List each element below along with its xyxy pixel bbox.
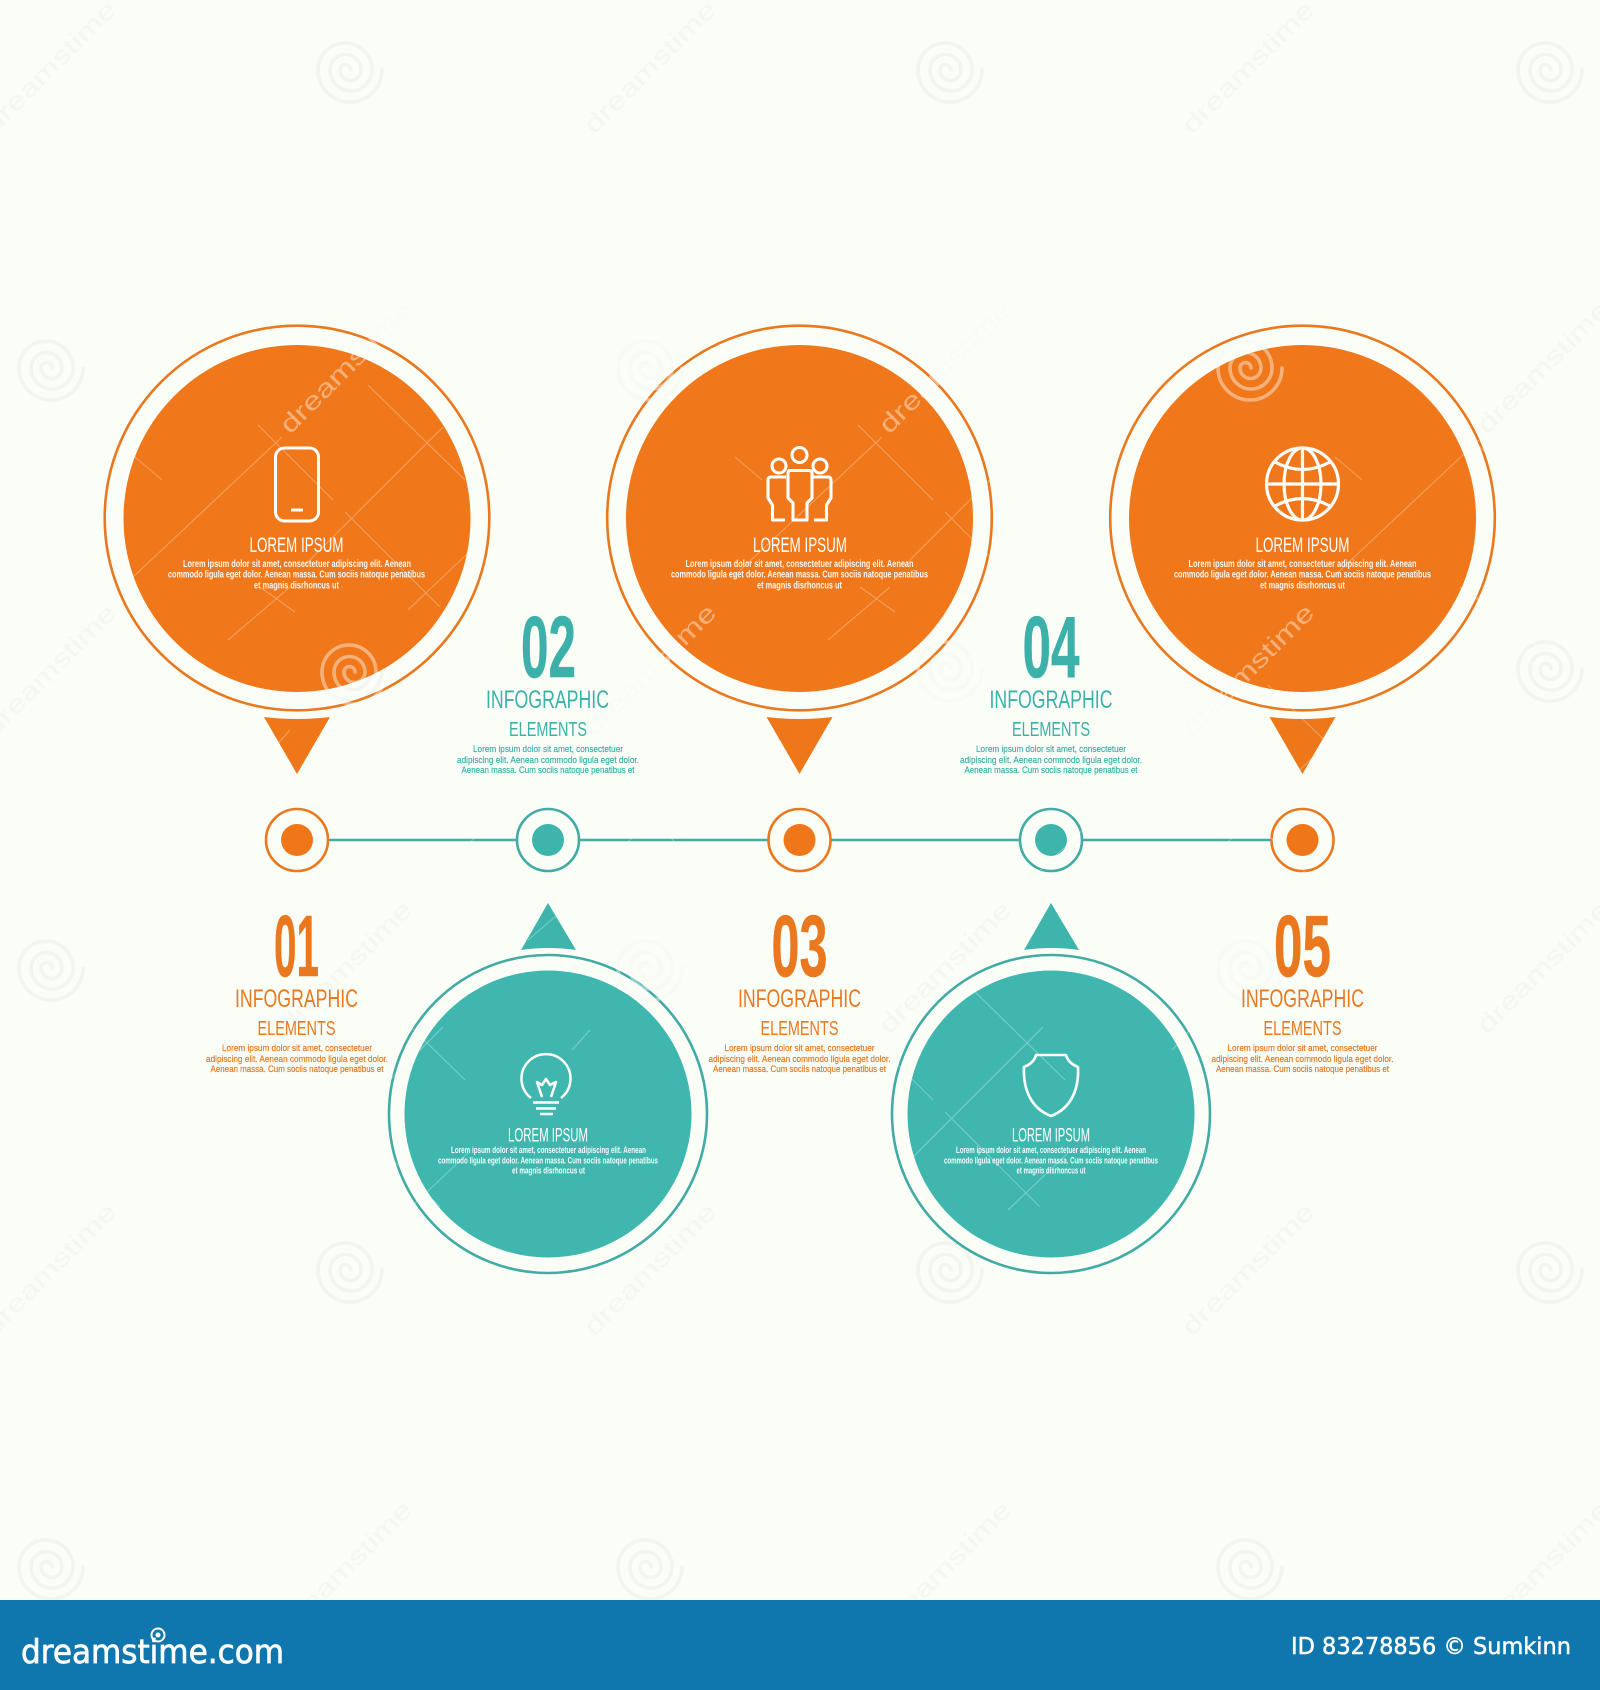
circle 2 text <box>438 1126 658 1176</box>
panel: orange circle 3 <box>607 326 992 774</box>
label block 03: 03 <box>772 898 828 995</box>
watermark lines and spirals over circles: dreamstime <box>274 296 418 439</box>
icon: shield <box>1024 1055 1078 1116</box>
circle 2 text: Lorem ipsum dolor sit amet, consectetuer adipiscing elit. Aenean <box>451 1145 646 1156</box>
label block 03 <box>708 898 890 1075</box>
circle 1 text: et magnis disrhoncus ut <box>254 580 339 592</box>
circle 4 text: LOREM IPSUM <box>1012 1126 1090 1146</box>
circle 3 text: Lorem ipsum dolor sit amet, consectetuer adipiscing elit. Aenean <box>686 558 914 570</box>
label block 02 <box>457 599 639 776</box>
label block 04: INFOGRAPHIC <box>990 686 1112 714</box>
circle 4 text <box>944 1126 1158 1176</box>
label block 04: 04 <box>1022 599 1080 696</box>
timeline node 4 <box>1020 809 1082 871</box>
circle 5 text: Lorem ipsum dolor sit amet, consectetuer adipiscing elit. Aenean <box>1188 558 1416 570</box>
timeline node 3 <box>768 809 830 871</box>
timeline node 5 <box>1272 809 1334 871</box>
label block 05: ELEMENTS <box>1264 1018 1342 1040</box>
icon: light bulb <box>522 1054 570 1114</box>
watermark lines and spirals over circles: dreamstime <box>578 599 722 742</box>
label block 02: 02 <box>521 599 576 696</box>
circle 3 text: LOREM IPSUM <box>753 534 847 557</box>
label block 03: Aenean massa. Cum sociis natoque penatibus et <box>713 1064 886 1075</box>
panel: teal circle 4 <box>892 903 1210 1273</box>
faint watermark pattern: dreamstime <box>578 0 722 139</box>
icon: smartphone <box>276 448 318 521</box>
label block 02: ELEMENTS <box>509 719 587 741</box>
icon: people group <box>768 448 831 520</box>
circle 3 text <box>671 534 928 592</box>
label block 01: 01 <box>274 898 319 995</box>
label block 01: ELEMENTS <box>258 1018 336 1040</box>
panel: orange circle 1 <box>105 326 489 774</box>
label block 03: adipiscing elit. Aenean commodo ligula eget dolor. <box>708 1054 890 1065</box>
circle 4 text: commodo ligula eget dolor. Aenean massa. Cum sociis natoque penatibus <box>944 1156 1158 1166</box>
circle 1 text: LOREM IPSUM <box>250 534 344 557</box>
circle 3 text: commodo ligula eget dolor. Aenean massa. Cum sociis natoque penatibus <box>671 568 928 580</box>
circle 1 text: Lorem ipsum dolor sit amet, consectetuer adipiscing elit. Aenean <box>183 558 411 570</box>
label block 03: ELEMENTS <box>760 1018 838 1040</box>
watermark lines and spirals over circles: dreamstime <box>1176 599 1320 742</box>
label block 05 <box>1212 898 1394 1075</box>
faint watermark pattern: dreamstime <box>1176 599 1320 742</box>
circle 5 text <box>1174 534 1431 592</box>
timeline node 1 <box>266 809 328 871</box>
label block 05: INFOGRAPHIC <box>1241 985 1364 1013</box>
label block 01: adipiscing elit. Aenean commodo ligula eget dolor. <box>206 1054 388 1065</box>
footer bar <box>0 1600 1600 1690</box>
faint watermark pattern: dreamstime <box>873 1496 1017 1639</box>
timeline node 2 <box>517 809 579 871</box>
panel: teal circle 2 <box>389 903 707 1273</box>
label block 04: Aenean massa. Cum sociis natoque penatibus et <box>964 765 1138 776</box>
circle 1 text <box>168 534 425 592</box>
label block 05: adipiscing elit. Aenean commodo ligula eget dolor. <box>1212 1054 1394 1065</box>
circle 5 text: LOREM IPSUM <box>1256 534 1350 557</box>
faint watermark pattern: dreamstime <box>873 296 1017 439</box>
circle 5 text: et magnis disrhoncus ut <box>1260 580 1345 592</box>
faint watermark pattern: dreamstime <box>1471 896 1600 1039</box>
circle 1 text: commodo ligula eget dolor. Aenean massa. Cum sociis natoque penatibus <box>168 568 425 580</box>
footer credit: ID 83278856 © Sumkinn <box>1291 1634 1571 1660</box>
faint watermark pattern: dreamstime <box>274 896 418 1039</box>
label block 04 <box>960 599 1142 776</box>
label block 01: Aenean massa. Cum sociis natoque penatibus et <box>210 1064 384 1075</box>
label block 02: Lorem ipsum dolor sit amet, consectetuer <box>473 744 623 755</box>
faint watermark pattern: dreamstime <box>578 1198 722 1341</box>
watermark lines and spirals over circles: dreamstime <box>873 296 1017 439</box>
faint watermark pattern: dreamstime <box>873 896 1017 1039</box>
watermark lines and spirals over circles <box>133 296 1600 1650</box>
icon: globe <box>1266 448 1338 520</box>
faint watermark pattern: dreamstime <box>1471 296 1600 439</box>
faint watermark pattern: dreamstime <box>274 1496 418 1639</box>
label block 02: Aenean massa. Cum sociis natoque penatibus et <box>462 765 635 776</box>
label block 01 <box>206 898 388 1075</box>
panel: orange circle 5 <box>1110 326 1495 774</box>
faint watermark pattern: dreamstime <box>578 599 722 742</box>
circle 3 text: et magnis disrhoncus ut <box>757 580 842 592</box>
faint watermark pattern: dreamstime <box>1471 1496 1600 1639</box>
label block 01: INFOGRAPHIC <box>235 985 358 1013</box>
label block 01: Lorem ipsum dolor sit amet, consectetuer <box>222 1043 372 1054</box>
circle 4 text: et magnis disrhoncus ut <box>1016 1166 1086 1176</box>
timeline connector line <box>297 839 1302 841</box>
label block 05: Aenean massa. Cum sociis natoque penatibus et <box>1216 1064 1389 1075</box>
faint watermark pattern: dreamstime <box>1176 0 1320 139</box>
label block 03: INFOGRAPHIC <box>738 985 861 1013</box>
circle 2 text: LOREM IPSUM <box>508 1126 588 1146</box>
label block 04: adipiscing elit. Aenean commodo ligula eget dolor. <box>960 755 1142 766</box>
faint watermark pattern: dreamstime <box>274 296 418 439</box>
label block 02: INFOGRAPHIC <box>486 686 609 714</box>
faint watermark pattern: dreamstime <box>1176 1198 1320 1341</box>
circle 2 text: commodo ligula eget dolor. Aenean massa. Cum sociis natoque penatibus <box>438 1156 658 1166</box>
label block 04: Lorem ipsum dolor sit amet, consectetuer <box>976 744 1126 755</box>
circle 4 text: Lorem ipsum dolor sit amet, consectetuer adipiscing elit. Aenean <box>956 1145 1146 1156</box>
footer logo: dreamstime.com <box>21 1632 284 1671</box>
label block 05: Lorem ipsum dolor sit amet, consectetuer <box>1228 1043 1378 1054</box>
label block 05: 05 <box>1274 898 1331 995</box>
circle 5 text: commodo ligula eget dolor. Aenean massa. Cum sociis natoque penatibus <box>1174 568 1431 580</box>
label block 02: adipiscing elit. Aenean commodo ligula eget dolor. <box>457 755 639 766</box>
label block 04: ELEMENTS <box>1012 719 1090 741</box>
circle 2 text: et magnis disrhoncus ut <box>512 1166 586 1176</box>
label block 03: Lorem ipsum dolor sit amet, consectetuer <box>724 1043 874 1054</box>
